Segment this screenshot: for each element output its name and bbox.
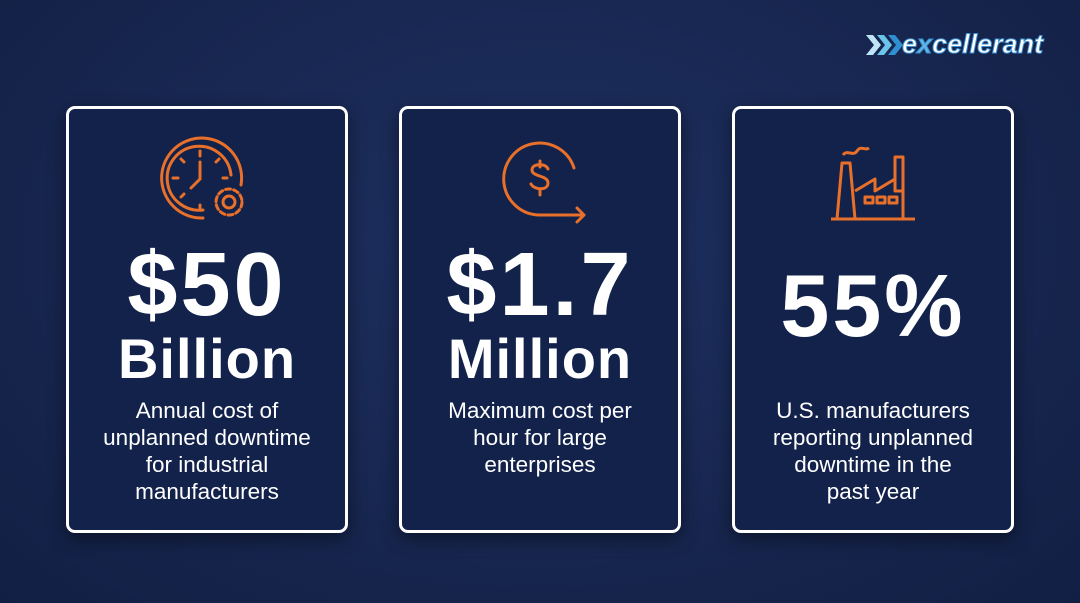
logo: excellerant xyxy=(902,29,1043,59)
panel: hourly cost: Million xyxy=(448,327,632,390)
panel: hourly cost: Maximum cost per xyxy=(448,398,632,423)
description xyxy=(103,398,311,504)
icon: factory xyxy=(831,146,915,220)
icon: dollar circle arrow xyxy=(502,142,586,224)
panel: percentage: 55% xyxy=(780,256,966,355)
panel: percentage xyxy=(732,106,1014,533)
unit: Billion xyxy=(118,327,296,390)
panel: hourly cost: hour for large xyxy=(473,425,607,450)
panel: hourly cost xyxy=(399,106,681,533)
description: Annual cost of xyxy=(136,398,278,423)
description: for industrial xyxy=(146,452,268,477)
panel: percentage: downtime in the xyxy=(794,452,952,477)
panel: hourly cost: $1.7 xyxy=(446,235,634,335)
panel: percentage: reporting unplanned xyxy=(773,425,973,450)
panel: percentage: U.S. manufacturers xyxy=(776,398,970,423)
panel: hourly cost: enterprises xyxy=(484,452,596,477)
panel: annual cost xyxy=(66,106,348,533)
icon: clock with gear xyxy=(160,136,244,220)
number: $50 xyxy=(127,235,287,335)
panel: percentage: past year xyxy=(827,479,919,504)
description: manufacturers xyxy=(135,479,279,504)
description: unplanned downtime xyxy=(103,425,311,450)
